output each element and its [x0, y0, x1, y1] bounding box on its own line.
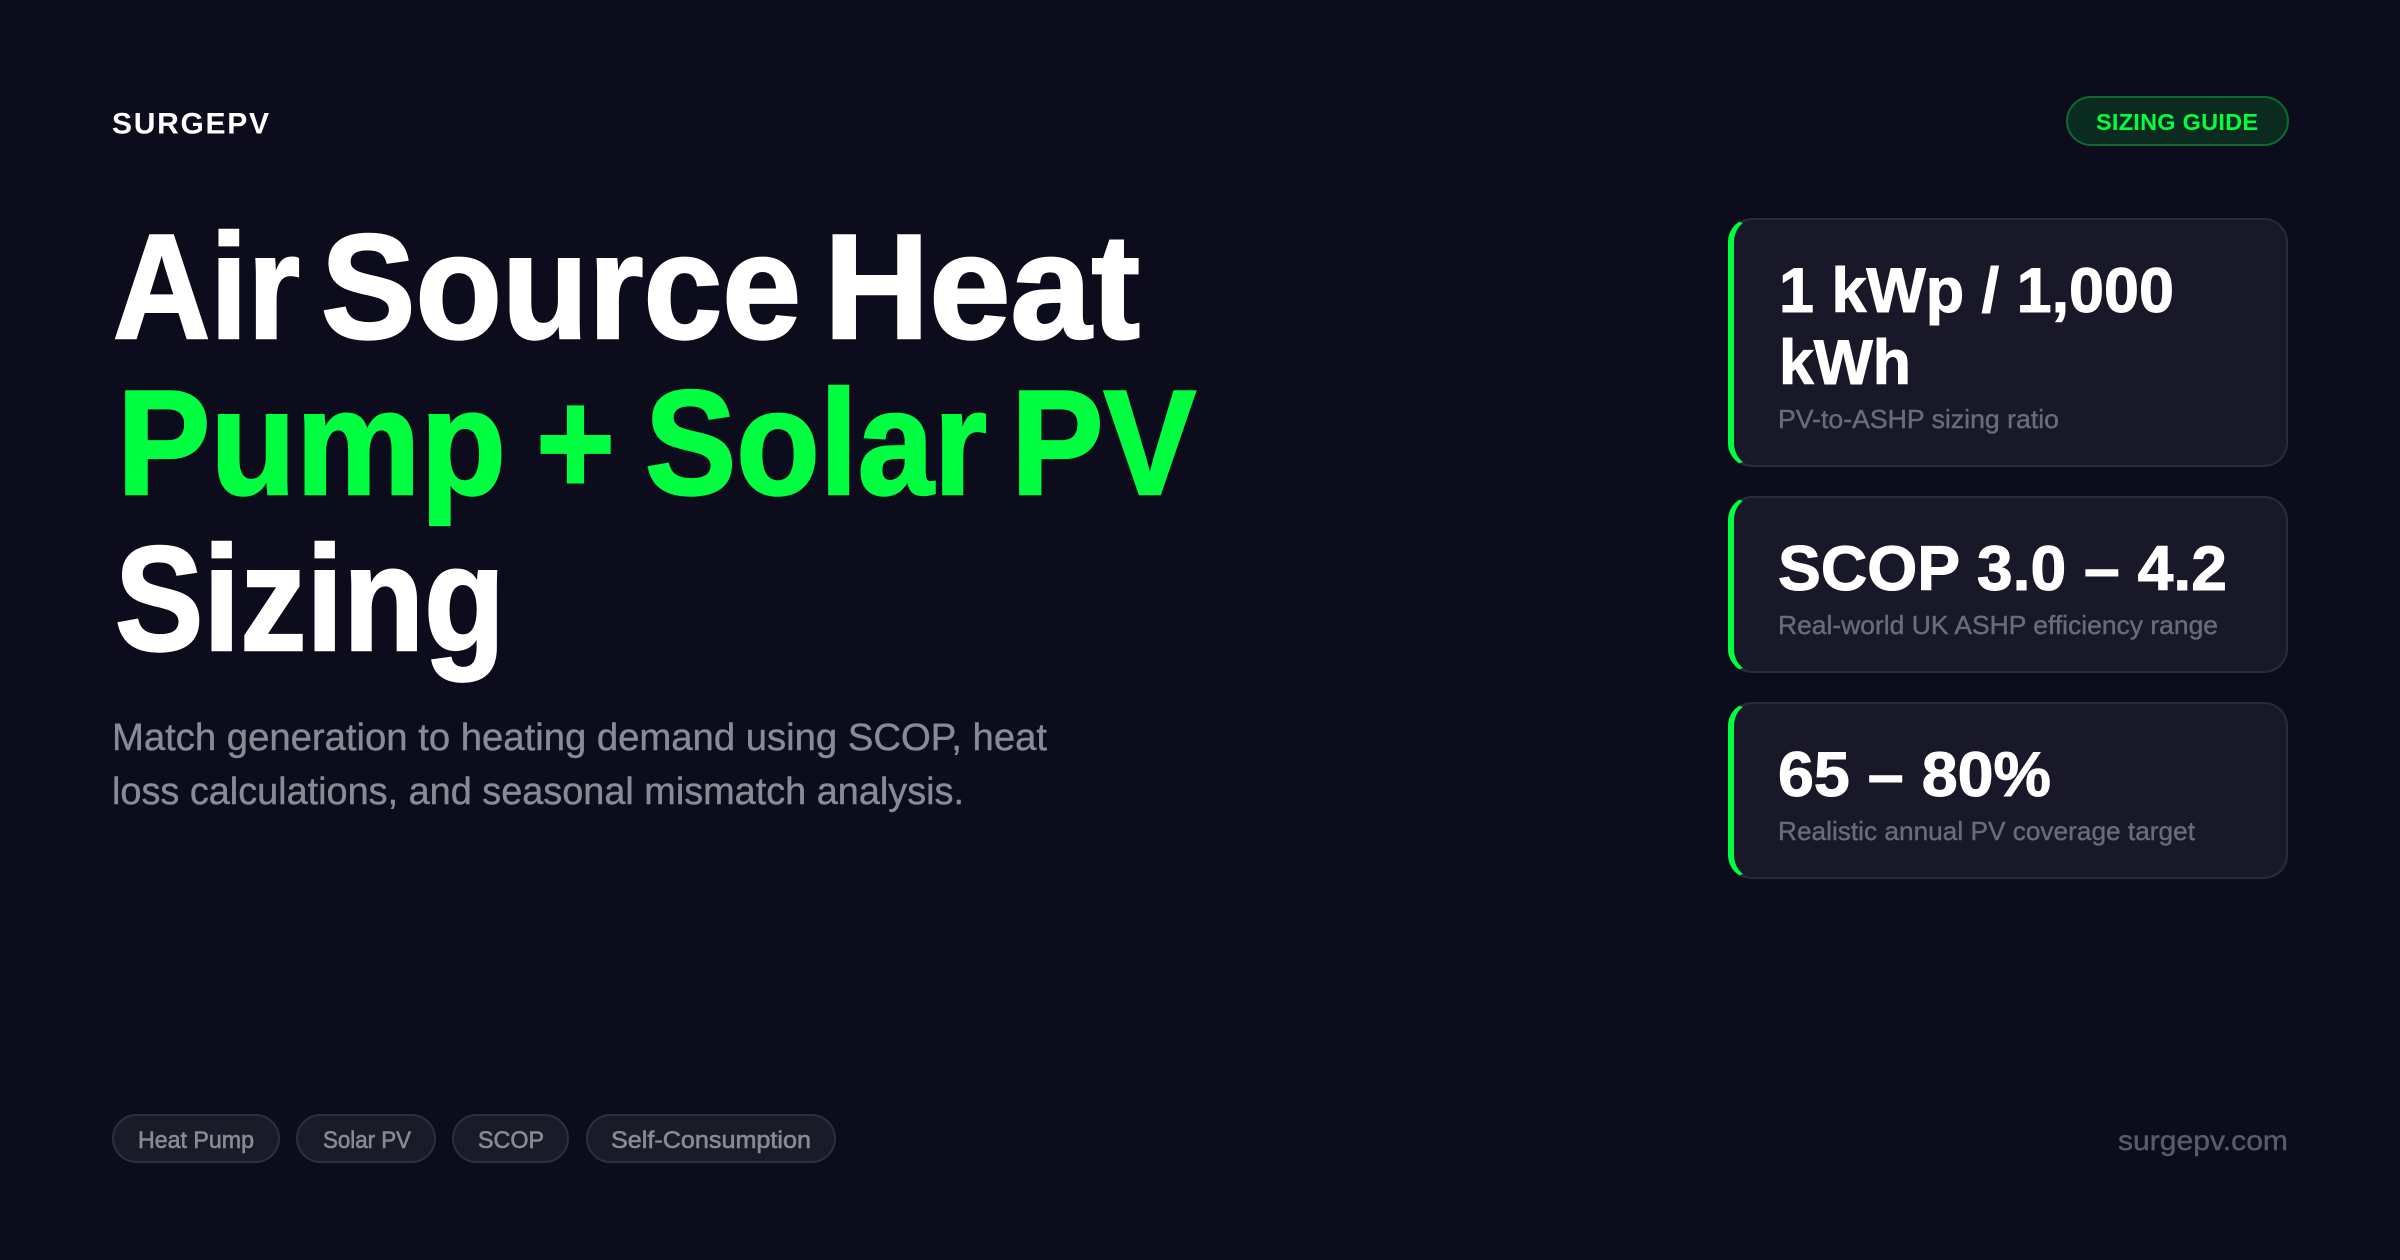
title line 1: Heat	[824, 203, 1140, 370]
stat card: PV sizing ratio: 1 kWp / 1,000	[1779, 256, 2174, 326]
footer url: surgepv.com	[2118, 1125, 2288, 1156]
tag: scop: SCOP	[478, 1127, 544, 1154]
stat card: PV coverage: 65 – 80%	[1778, 740, 2051, 810]
tag: heat pump	[113, 1115, 279, 1162]
tags row	[113, 1115, 835, 1162]
badge: sizing guide: SIZING GUIDE	[2096, 109, 2258, 135]
title line 1	[113, 203, 1140, 370]
stat card: PV coverage: Realistic annual PV coverage target	[1778, 816, 2196, 846]
title line 2 highlighted: +	[536, 359, 615, 526]
tag: self-consumption	[587, 1115, 835, 1162]
brand wordmark: SURGEPV	[112, 108, 269, 140]
tag: heat pump: Heat Pump	[138, 1127, 254, 1154]
stat card: PV sizing ratio: kWh	[1779, 328, 1911, 398]
title line 1: Source	[321, 203, 801, 370]
title line 2 highlighted: Pump	[117, 359, 506, 526]
stat card: SCOP range: Real-world UK ASHP efficiency range	[1778, 610, 2218, 640]
title line 2 highlighted	[117, 359, 1196, 526]
subtitle: Match generation to heating demand using SCOP, heat	[112, 717, 1047, 759]
stat card: PV sizing ratio	[1728, 218, 2288, 467]
title line 3: Sizing	[115, 515, 505, 682]
title line 1: Air	[113, 203, 300, 370]
stat card: SCOP range	[1728, 496, 2288, 673]
tag: solar pv: Solar PV	[323, 1127, 411, 1154]
stat card: SCOP range: SCOP 3.0 – 4.2	[1778, 534, 2227, 604]
tag: self-consumption: Self-Consumption	[611, 1127, 811, 1154]
stat card: PV sizing ratio: PV-to-ASHP sizing ratio	[1778, 404, 2059, 434]
tag: solar pv	[297, 1115, 435, 1162]
subtitle	[112, 717, 1047, 813]
title	[113, 203, 1196, 682]
tag: scop	[453, 1115, 568, 1162]
stat card: PV coverage	[1728, 702, 2288, 879]
badge: sizing guide	[2067, 97, 2288, 145]
title line 2 highlighted: PV	[1011, 359, 1196, 526]
subtitle: loss calculations, and seasonal mismatch analysis.	[112, 771, 964, 813]
title line 2 highlighted: Solar	[645, 359, 987, 526]
